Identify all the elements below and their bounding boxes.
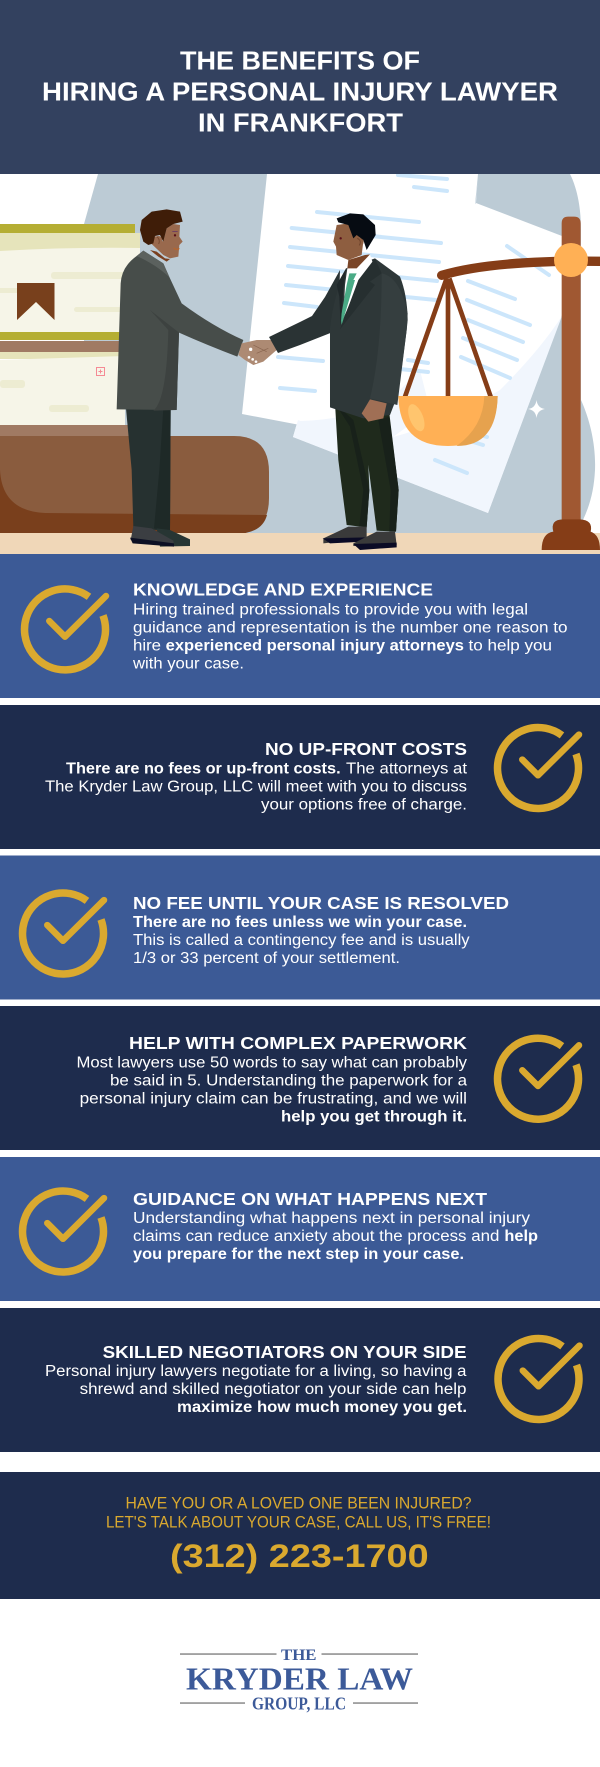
logo: The Kryder Law Group, LLC: GROUP, LLC: [252, 1694, 346, 1714]
icon: check mark in circle: [23, 1191, 104, 1272]
heading: HELP WITH COMPLEX PAPERWORK: [129, 1033, 467, 1053]
body text: guidance and representation is the number one reason to: [133, 619, 568, 636]
logo: The Kryder Law Group, LLC: KRYDER LAW: [186, 1660, 413, 1696]
figure: lawyer on the right: [269, 213, 408, 550]
icon: check mark in circle: [498, 728, 579, 809]
icon: check mark in circle: [25, 589, 106, 670]
body text: Hiring trained professionals to provide you with legal: [133, 601, 528, 618]
body text: [133, 1210, 538, 1263]
body text: [132, 601, 568, 672]
body text: maximize how much money you get.: [177, 1399, 467, 1416]
panel: knowledge and experience: [0, 554, 600, 698]
body text: The Kryder Law Group, LLC will meet with you to discuss: [45, 778, 467, 795]
body text: help: [504, 1228, 538, 1245]
title: IN FRANKFORT: [198, 110, 403, 138]
documents: [242, 174, 562, 513]
icon: check mark in circle: [498, 1038, 579, 1119]
body text: Understanding what happens next in personal injury: [133, 1210, 530, 1227]
body text: you prepare for the next step in your case.: [133, 1246, 464, 1263]
body text: your options free of charge.: [261, 796, 467, 813]
panel: skilled negotiators on your side: [0, 1308, 600, 1452]
phone number: (312) 223-1700: [170, 1538, 429, 1574]
body text: [45, 1363, 467, 1416]
heading: GUIDANCE ON WHAT HAPPENS NEXT: [133, 1189, 487, 1209]
title: HIRING A PERSONAL INJURY LAWYER: [42, 79, 558, 107]
call to action text: [106, 1495, 491, 1532]
illustration: handshake between client and lawyer with scales of justice: [0, 174, 600, 554]
body text: experienced personal injury attorneys: [166, 637, 464, 654]
figure: client on the left: [117, 209, 277, 547]
body text: This is called a contingency fee and is usually: [133, 932, 470, 949]
body text: hire: [133, 637, 161, 654]
body text: personal injury claim can be frustrating, and we will: [80, 1090, 467, 1107]
scales of justice: [398, 217, 600, 550]
body text: to help you: [468, 637, 552, 654]
icon: sparkle: [528, 400, 544, 418]
body text: [133, 914, 470, 967]
body text: [45, 760, 468, 813]
logo: The Kryder Law Group, LLC: [180, 1647, 418, 1714]
body text: be said in 5. Understanding the paperwork for a: [110, 1072, 467, 1089]
call to action text: LET'S TALK ABOUT YOUR CASE, CALL US, IT'S FREE!: [106, 1514, 491, 1532]
body text: Most lawyers use 50 words to say what can probably: [76, 1054, 467, 1071]
body text: help you get through it.: [281, 1108, 467, 1125]
body text: [76, 1054, 467, 1125]
book base / sofa: [0, 436, 269, 534]
call to action text: HAVE YOU OR A LOVED ONE BEEN INJURED?: [126, 1495, 472, 1513]
body text: shrewd and skilled negotiator on your side can help: [80, 1381, 466, 1398]
heading: NO FEE UNTIL YOUR CASE IS RESOLVED: [133, 893, 509, 913]
logo: The Kryder Law Group, LLC: THE: [281, 1647, 316, 1664]
book: [0, 224, 140, 436]
body text: claims can reduce anxiety about the process and: [133, 1228, 499, 1245]
panel: no up-front costs: [0, 705, 600, 849]
icon: check mark in circle: [498, 1339, 580, 1420]
title: THE BENEFITS OF: [180, 48, 420, 76]
header banner: [0, 0, 600, 174]
title: [42, 48, 558, 138]
panel: no fee until your case is resolved: [0, 856, 600, 1000]
panel: guidance on what happens next: [0, 1157, 600, 1301]
body text: Personal injury lawyers negotiate for a living, so having a: [45, 1363, 467, 1380]
panel: call to action: [0, 1472, 600, 1599]
heading: SKILLED NEGOTIATORS ON YOUR SIDE: [103, 1342, 467, 1362]
heading: KNOWLEDGE AND EXPERIENCE: [133, 580, 433, 600]
body text: The attorneys at: [346, 760, 468, 777]
body text: There are no fees or up-front costs.: [66, 760, 341, 777]
body text: There are no fees unless we win your case.: [133, 914, 467, 931]
ground: [0, 533, 600, 554]
body text: 1/3 or 33 percent of your settlement.: [133, 950, 400, 967]
body text: with your case.: [132, 655, 244, 672]
heading: NO UP-FRONT COSTS: [265, 739, 467, 759]
panel: help with complex paperwork: [0, 1006, 600, 1150]
icon: check mark in circle: [23, 893, 104, 974]
icon: bookmark: [17, 283, 54, 320]
